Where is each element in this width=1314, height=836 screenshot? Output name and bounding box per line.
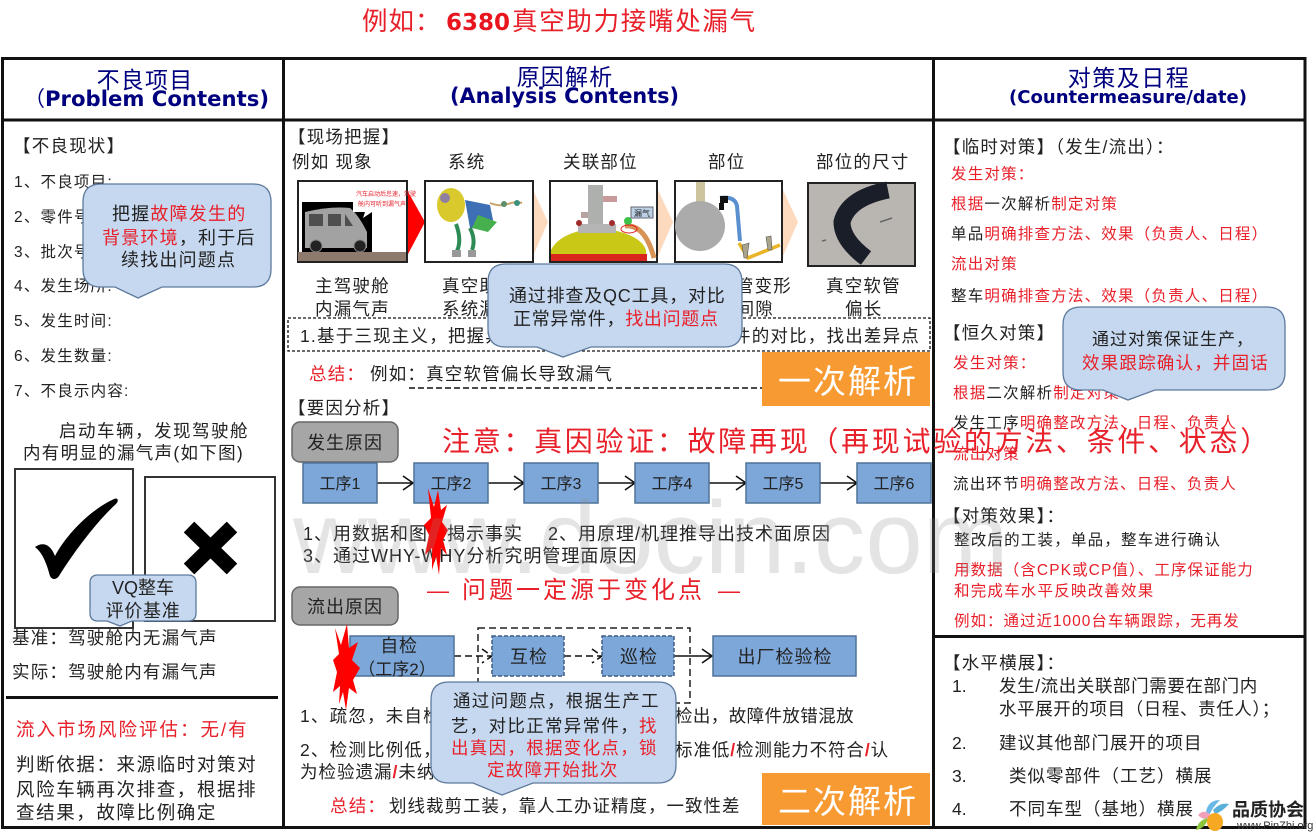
summary two: 总结： xyxy=(330,796,386,816)
text block: outflow reasons: 互检巡检未能检出，故障件放错混放 xyxy=(568,706,854,726)
step labels xyxy=(292,152,910,172)
step labels: 部位的尺寸 xyxy=(816,152,910,172)
text block: defect status list: 内有明显的漏气声(如下图) xyxy=(23,443,244,463)
text block: market risk xyxy=(16,719,257,823)
callout: VQ standard: 评价基准 xyxy=(106,601,180,621)
badge: first analysis: 一次解析 xyxy=(778,363,918,400)
step captions: 主驾驶舱 xyxy=(315,276,390,296)
step labels: 例如 现象 xyxy=(292,152,373,172)
process flow: occurrence: 工序2 xyxy=(431,475,472,493)
text block: market risk: 判断依据：来源临时对策对 xyxy=(16,754,257,775)
process flow: occurrence: 工序1 xyxy=(320,475,361,493)
text block: defect status list: 2、零件号: xyxy=(14,208,96,226)
process flow: occurrence: 工序6 xyxy=(874,475,915,493)
text block: defect status list: 【不良现状】 xyxy=(13,136,125,156)
heading: key factors: 【要因分析】 xyxy=(288,398,400,418)
text block: permanent measures: 根据二次解析制定对策 xyxy=(953,384,1120,402)
red notice: root cause verification: 注意：真因验证：故障再现（再现试验的方法、条件、状态） xyxy=(442,426,1271,457)
text block: horizontal rollout: 1. xyxy=(952,676,967,696)
text block: outflow reasons xyxy=(300,706,889,782)
tag: occurrence cause: 发生原因 xyxy=(307,433,383,453)
summary one: 例如：真空软管偏长导致漏气 xyxy=(370,364,613,384)
image: vacuum booster system xyxy=(425,181,533,262)
callout: effect tracking: 效果跟踪确认，并固话 xyxy=(1082,353,1269,373)
logo: pinzhi: www.PinZhi.org xyxy=(1236,820,1313,832)
text block: analysis methods xyxy=(303,524,831,566)
step labels: 部位 xyxy=(708,152,745,172)
panel: analysis contents xyxy=(288,64,1271,825)
text block: defect status list xyxy=(13,136,249,463)
arrow: red step arrow xyxy=(407,190,425,256)
heading: analysis contents xyxy=(450,64,679,108)
heading: problem contents: Problem Contents) xyxy=(45,87,269,111)
panel: countermeasure and date xyxy=(934,65,1305,819)
summary one: 总结： xyxy=(309,364,365,384)
process flow: occurrence: 工序4 xyxy=(652,475,693,493)
title: 例如： xyxy=(362,8,442,36)
text block: effect: 和完成车水平反映改善效果 xyxy=(954,582,1154,600)
callout: background environment xyxy=(83,184,271,298)
text block: effect: 例如：通过近1000台车辆跟踪，无再发 xyxy=(954,612,1240,630)
badge: second analysis xyxy=(762,773,930,825)
text block: effect: 用数据（含CPK或CP值）、工序保证能力 xyxy=(954,561,1254,579)
red notice: change point: 问题一定源于变化点 xyxy=(462,577,705,604)
text block: permanent measures: 流出对策 xyxy=(953,445,1020,463)
image: part location xyxy=(675,181,782,262)
text block: analysis methods: 3、通过WHY-WHY分析究明管理面原因 xyxy=(303,546,637,566)
heading: countermeasure xyxy=(1009,65,1247,108)
red notice: change point: — xyxy=(718,578,743,603)
dashed note box: 常件与异常件的对比，找出差异点 xyxy=(640,326,920,346)
text block: defect status list: 5、发生时间: xyxy=(14,312,113,330)
callout: background environment: 背景环境，利于后 xyxy=(102,228,256,248)
step captions: 真空软管 xyxy=(826,276,901,296)
step captions: 系统漏气 xyxy=(442,299,517,319)
text block: temporary measures: 流出对策 xyxy=(951,255,1018,273)
callout: VQ standard: VQ整车 xyxy=(112,578,174,598)
callout: background environment: 把握故障发生的 xyxy=(112,204,246,224)
text block: horizontal rollout: 发生/流出关联部门需要在部门内 xyxy=(999,676,1258,696)
text block: horizontal rollout: 4. xyxy=(952,799,967,819)
icon: cross mark box xyxy=(145,477,275,621)
title: 真空助力接嘴处漏气 xyxy=(512,8,757,36)
text block: standard and actual: 实际：驾驶舱内有漏气声 xyxy=(12,662,218,682)
step labels: 系统 xyxy=(448,152,485,172)
text block: effect xyxy=(943,506,1254,630)
process flow: outflow: （工序2） xyxy=(358,660,436,679)
logo: pinzhi xyxy=(1196,799,1313,832)
callout: find the problem point: 通过排查及QC工具，对比 xyxy=(509,286,726,306)
text block: horizontal rollout: 【水平横展】： xyxy=(943,653,1065,673)
red notice: change point: — xyxy=(427,578,452,603)
heading: problem contents xyxy=(24,67,269,111)
image: hose photo xyxy=(808,183,915,266)
process flow: occurrence: 工序5 xyxy=(763,475,804,493)
text block: market risk: 流入市场风险评估：无/有 xyxy=(16,719,249,740)
callout: find the true cause xyxy=(431,682,676,795)
callout: find the true cause: 定故障开始批次 xyxy=(487,760,619,780)
text block: permanent measures: 发生对策： xyxy=(953,354,1037,372)
badge: first analysis xyxy=(762,352,930,406)
step captions: 真空助力 xyxy=(442,276,517,296)
step captions: 有间隙 xyxy=(718,299,774,319)
step captions xyxy=(315,276,901,319)
text block: permanent measures xyxy=(943,323,1237,493)
text block: permanent measures: 【恒久对策】 xyxy=(943,323,1055,343)
callout: VQ standard xyxy=(90,575,196,626)
tag: outflow cause xyxy=(292,587,398,625)
process flow: outflow: 出厂检验检 xyxy=(738,647,832,667)
burst: process 2 failure point xyxy=(424,488,448,575)
heading: problem contents: 不良项目 xyxy=(97,67,193,93)
heading: problem contents: （ xyxy=(24,88,45,111)
text block: effect: 【对策效果】： xyxy=(943,506,1065,526)
text block: outflow reasons: 检验标准低/检测能力不符合/认 xyxy=(638,740,889,760)
text block: defect status list: 1、不良项目: xyxy=(14,173,113,191)
text block: temporary measures xyxy=(943,137,1268,305)
callout: find the true cause: 通过问题点，根据生产工 xyxy=(453,691,660,711)
summary one xyxy=(309,364,762,388)
text block: temporary measures: 【临时对策】（发生/流出）： xyxy=(943,137,1175,157)
image: van with speech bubble: 汽车启动后怠速，驾驶 xyxy=(356,190,416,198)
process flow: occurrence: 工序3 xyxy=(541,475,582,493)
text block: effect: 整改后的工装，单品，整车进行确认 xyxy=(954,531,1221,549)
dashed note box: 1.基于三现主义，把握异常 xyxy=(300,326,523,346)
summary two: 划线裁剪工装，靠人工办证精度，一致性差 xyxy=(389,796,740,816)
text block: horizontal rollout xyxy=(943,653,1280,819)
tag: outflow cause: 流出原因 xyxy=(307,597,383,617)
image: van with speech bubble xyxy=(298,181,416,262)
logo: pinzhi: 品质协会 xyxy=(1232,799,1304,820)
process flow: outflow: 巡检 xyxy=(620,647,658,667)
text block: temporary measures: 根据一次解析制定对策 xyxy=(951,195,1118,213)
callout: background environment: 续找出问题点 xyxy=(121,250,236,270)
arrow: peach step arrows xyxy=(533,190,798,256)
callout: find the true cause: 艺，对比正常异常件，找 xyxy=(451,716,658,736)
process flow: outflow xyxy=(350,628,856,703)
text block: temporary measures: 单品明确排查方法、效果（负责人、日程） xyxy=(951,225,1268,243)
step captions: 内漏气声 xyxy=(315,299,390,319)
text block: outflow reasons: 2、检测比例低，检测 xyxy=(300,740,479,760)
image: related part xyxy=(550,181,657,262)
panel: problem contents xyxy=(6,67,278,823)
step captions: 偏长 xyxy=(845,299,882,319)
step captions: 软管变形 xyxy=(717,276,792,296)
text block: horizontal rollout: 3. xyxy=(952,766,967,786)
divider xyxy=(6,696,278,699)
title xyxy=(362,8,757,36)
callout: find the problem point: 正常异常件，找出问题点 xyxy=(513,309,719,329)
step labels: 关联部位 xyxy=(563,152,638,172)
text block: defect status list: 3、批次号: xyxy=(14,243,96,261)
image: van with speech bubble: 舱内可听到漏气声 xyxy=(358,200,406,208)
text block: analysis methods: 2、用原理/机理推导出技术面原因 xyxy=(548,524,831,544)
process flow: outflow: 自检 xyxy=(380,636,418,656)
heading: countermeasure: (Countermeasure/date) xyxy=(1009,87,1247,108)
heading: analysis contents: (Analysis Contents) xyxy=(450,84,679,108)
text block: outflow reasons: 为检验遗漏/未纳入检验项目 xyxy=(300,762,528,782)
title: 6380 xyxy=(446,10,510,36)
heading: analysis contents: 原因解析 xyxy=(517,64,613,90)
text block: horizontal rollout: 2. xyxy=(952,733,967,753)
callout: effect tracking: 通过对策保证生产， xyxy=(1092,330,1254,349)
text block: horizontal rollout: 不同车型（基地）横展 xyxy=(1009,799,1194,819)
text block: outflow reasons: 1、疏忽，未自检到位 xyxy=(300,706,479,726)
badge: second analysis: 二次解析 xyxy=(778,783,918,820)
image: related part: 漏气 xyxy=(634,208,650,218)
text block: temporary measures: 整车明确排查方法、效果（负责人、日程） xyxy=(951,287,1268,305)
callout: effect tracking xyxy=(1063,307,1285,400)
dashed note box xyxy=(288,318,930,351)
text block: temporary measures: 发生对策： xyxy=(951,165,1035,183)
text block: market risk: 查结果，故障比例确定 xyxy=(16,802,217,823)
text block: standard and actual: 基准：驾驶舱内无漏气声 xyxy=(12,628,218,648)
divider xyxy=(934,635,1305,638)
text block: permanent measures: 发生工序明确整改方法、日程、负责人 xyxy=(953,414,1237,432)
text block: horizontal rollout: 类似零部件（工艺）横展 xyxy=(1009,766,1212,786)
tag: occurrence cause xyxy=(292,422,398,462)
text block: defect status list: 6、发生数量: xyxy=(14,347,113,365)
process flow: occurrence xyxy=(303,463,931,503)
text block: analysis methods: 1、用数据和图表揭示事实 xyxy=(303,524,523,544)
text block: permanent measures: 流出环节明确整改方法、日程、负责人 xyxy=(953,475,1237,493)
heading: on-site: 【现场把握】 xyxy=(288,127,400,147)
text block: standard and actual xyxy=(12,628,218,682)
callout: find the true cause: 出真因，根据变化点，锁 xyxy=(451,738,658,758)
icon: check mark box xyxy=(15,469,133,628)
text block: defect status list: 7、不良示内容: xyxy=(14,382,130,400)
process flow: outflow: 互检 xyxy=(510,647,548,667)
text block: defect status list: 4、发生场所: xyxy=(14,277,113,295)
text block: defect status list: 启动车辆，发现驾驶舱 xyxy=(59,421,249,441)
watermark: www.docin.com xyxy=(292,480,1009,595)
text block: horizontal rollout: 水平展开的项目（日程、责任人）； xyxy=(999,699,1280,719)
burst: outflow failure point xyxy=(333,624,360,710)
text block: market risk: 风险车辆再次排查，根据排 xyxy=(16,779,257,800)
callout: find the problem point xyxy=(488,264,742,357)
heading: countermeasure: 对策及日程 xyxy=(1068,65,1190,91)
text block: horizontal rollout: 建议其他部门展开的项目 xyxy=(999,733,1202,753)
